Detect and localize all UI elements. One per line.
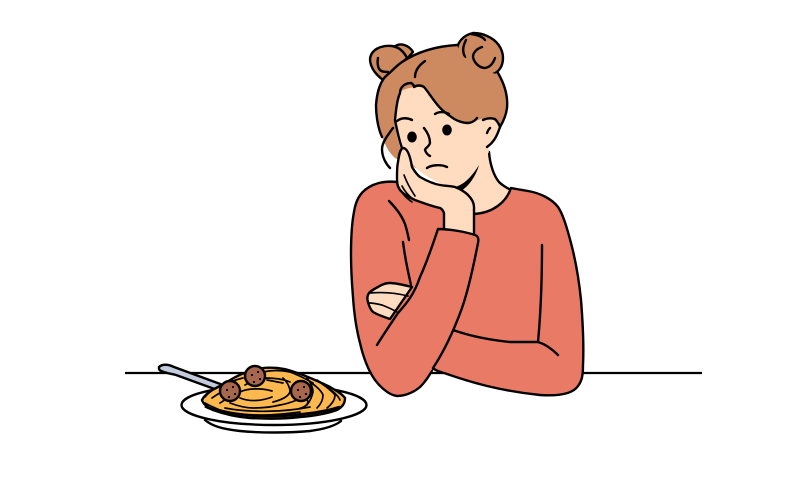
- ear: [487, 127, 500, 147]
- meatballs: [220, 366, 311, 401]
- jaw shadow: [455, 165, 479, 191]
- front arm sleeve: [377, 229, 478, 385]
- table edge line: [125, 372, 702, 374]
- fingers of tucked hand: [367, 283, 412, 319]
- girl: [351, 33, 583, 396]
- face: [395, 83, 500, 185]
- spaghetti: [202, 368, 345, 419]
- plate: [182, 385, 366, 432]
- hand on cheek: [397, 148, 474, 236]
- hair buns: [370, 33, 503, 83]
- eyes: [407, 124, 452, 142]
- nose and mouth: [424, 128, 447, 168]
- eyebrows: [397, 112, 449, 121]
- stray hair strands: [382, 61, 425, 168]
- torso, arms and sleeves: [351, 182, 583, 396]
- neck and collar skin: [440, 120, 511, 214]
- fork: [159, 365, 223, 391]
- hair back: [376, 45, 507, 170]
- plate of spaghetti: [159, 365, 366, 432]
